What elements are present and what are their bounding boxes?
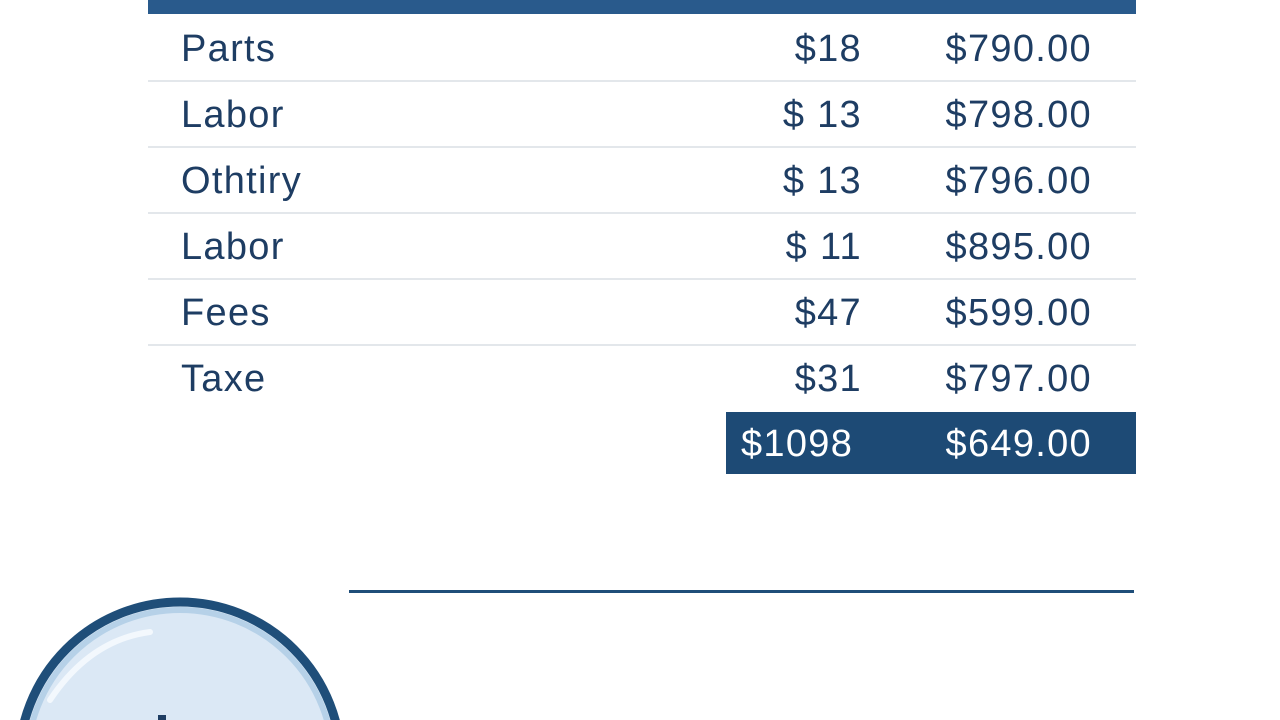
total bar	[726, 412, 1136, 474]
row: Labor: $798.00	[946, 94, 1092, 136]
row: Parts: $18	[795, 28, 862, 70]
total bar: $1098	[741, 423, 853, 465]
row: Labor 2: Labor	[181, 226, 285, 268]
row: Fees	[181, 292, 1092, 334]
table header bar	[148, 0, 1136, 14]
row: Othtiry: $796.00	[946, 160, 1092, 202]
row: Taxe: Taxe	[181, 358, 266, 400]
row: Fees: Fees	[181, 292, 271, 334]
row: Labor	[181, 94, 1092, 136]
row: Taxe: $797.00	[946, 358, 1092, 400]
row: Taxe: $31	[795, 358, 862, 400]
row: Parts: Parts	[181, 28, 276, 70]
row: Labor: $ 13	[783, 94, 862, 136]
icon: magnifier circle	[20, 598, 340, 720]
row: Othtiry: Othtiry	[181, 160, 302, 202]
signature line	[349, 590, 1134, 593]
row: Taxe	[181, 358, 1092, 400]
row: Othtiry	[181, 160, 1092, 202]
row: Fees: $599.00	[946, 292, 1092, 334]
row: Labor: Labor	[181, 94, 285, 136]
row: Parts	[181, 28, 1092, 70]
total bar: $649.00	[946, 423, 1092, 465]
row: Othtiry: $ 13	[783, 160, 862, 202]
row: Labor 2: $895.00	[946, 226, 1092, 268]
row: Labor 2: $ 11	[786, 226, 862, 268]
row: Labor 2	[181, 226, 1092, 268]
table rows	[181, 28, 1092, 400]
row: Fees: $47	[795, 292, 862, 334]
row: Parts: $790.00	[946, 28, 1092, 70]
